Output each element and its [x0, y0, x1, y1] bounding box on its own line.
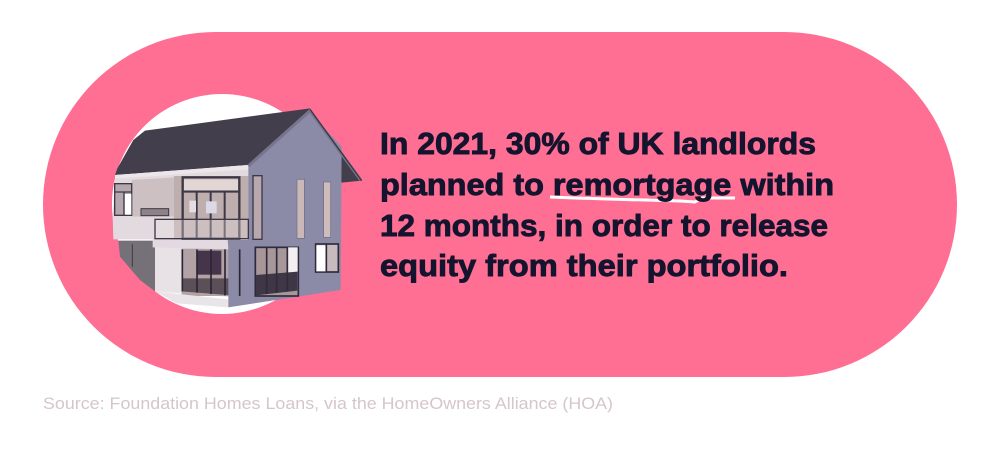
headline line 3: 12 months, in order to release: [380, 208, 828, 243]
house left window: [115, 184, 132, 215]
white underline: [550, 197, 735, 202]
house lower storey: [155, 247, 248, 298]
house lower door frames: [182, 249, 240, 296]
house eave: [115, 165, 248, 179]
house gable trim: [248, 111, 361, 180]
house balcony window frames: [183, 177, 239, 239]
house balcony railing: [155, 219, 248, 239]
house lower left interior: [118, 241, 155, 291]
house base slab: [155, 291, 228, 307]
icon: white circle behind house: [112, 94, 332, 314]
icon: house illustration: [113, 108, 362, 307]
text block: headline: [380, 126, 834, 283]
panel: pink pill background: [43, 32, 957, 377]
headline line 2: planned to remortgage within: [380, 167, 834, 202]
house side sliding door: [255, 247, 298, 296]
house side small window: [316, 244, 338, 272]
house side wall: [228, 113, 342, 307]
headline line 4: equity from their portfolio.: [380, 248, 788, 283]
house balcony slab: [153, 239, 228, 249]
house roof: [115, 108, 362, 183]
house wall vent: [141, 209, 169, 216]
source note: Source: Foundation Homes Loans, via the HomeOwners Alliance (HOA): [43, 394, 613, 413]
house front upper wall: [113, 167, 248, 240]
house upper interior: [174, 176, 248, 239]
house side narrow windows: [253, 176, 262, 239]
house upper wall shading: [132, 177, 174, 217]
headline line 1: In 2021, 30% of UK landlords: [380, 126, 816, 161]
house wall art: [189, 201, 196, 212]
